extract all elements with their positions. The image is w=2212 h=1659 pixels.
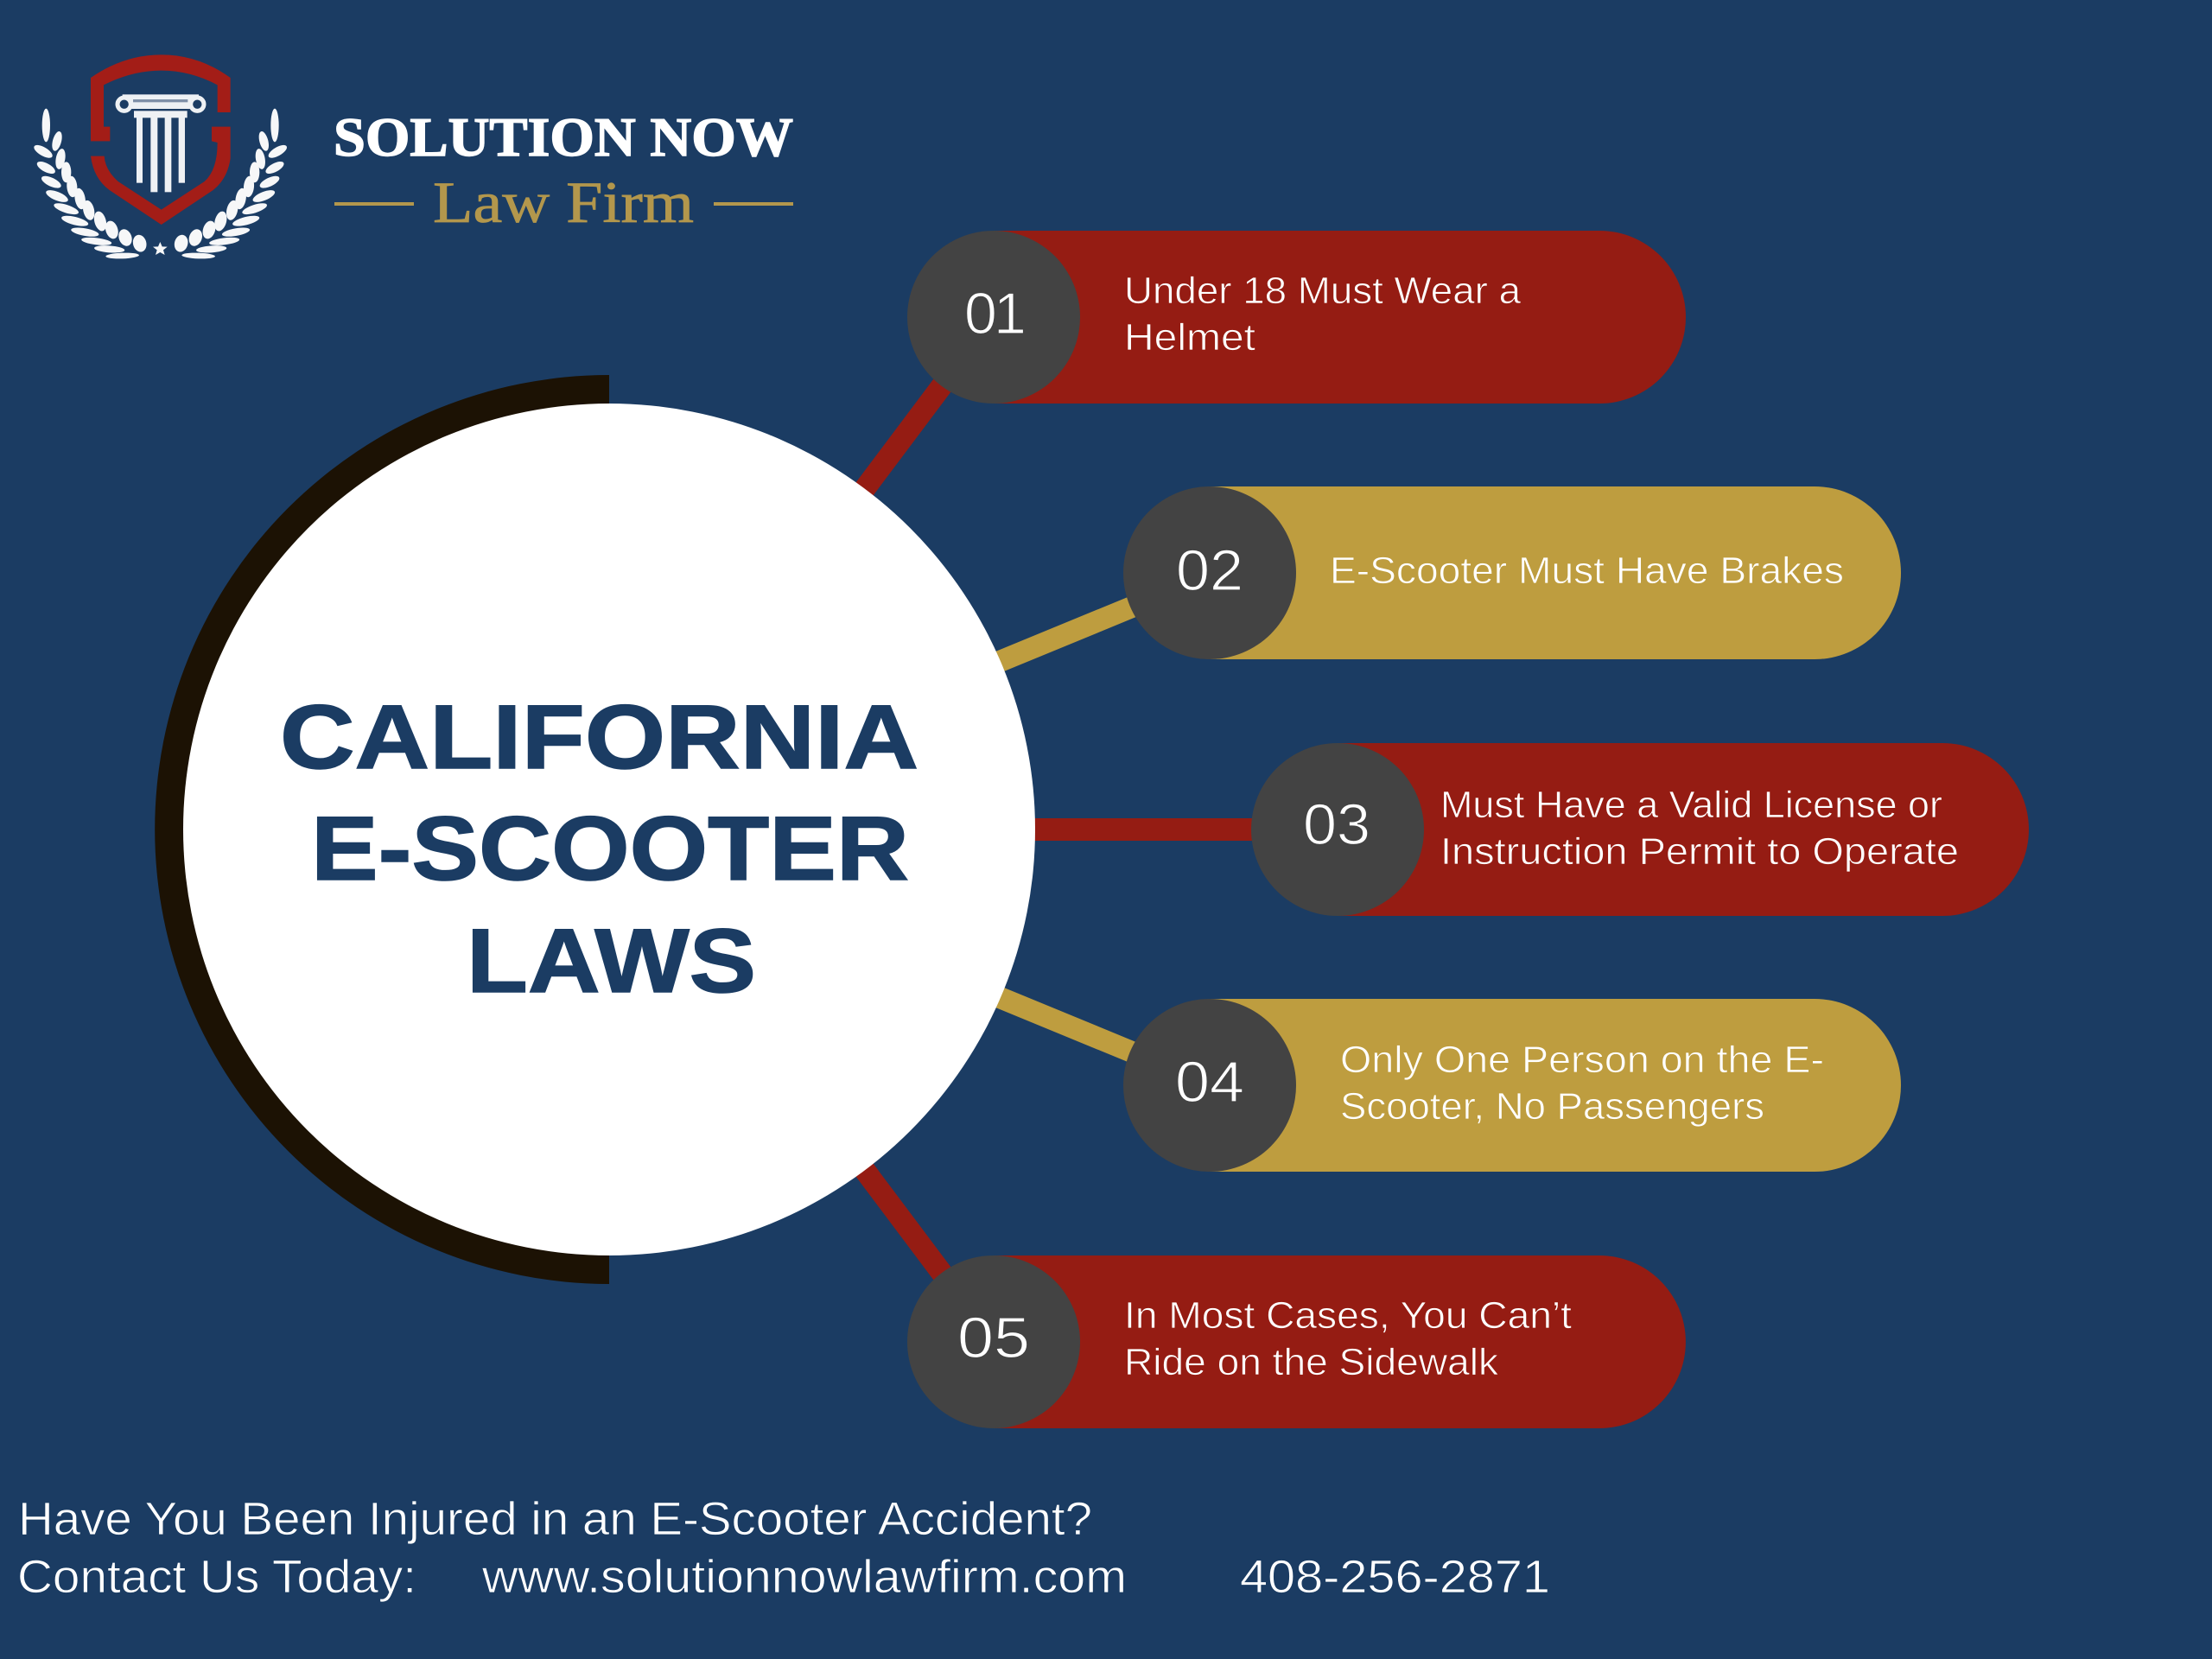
icon: star <box>153 242 168 255</box>
firm name: SOLUTION NOW <box>334 107 793 168</box>
text 05 <box>1124 1294 1572 1383</box>
number badge 01 <box>907 231 1080 404</box>
text 01: Under 18 Must Wear a <box>1124 270 1522 312</box>
title: CALIFORNIA <box>280 687 918 788</box>
dark half ring <box>155 375 609 1284</box>
number 04: 04 <box>1175 1050 1244 1115</box>
firm subtitle: Law Firm <box>433 169 694 235</box>
number 03: 03 <box>1303 792 1370 857</box>
white circle <box>183 404 1035 1255</box>
text 03 <box>1440 784 1959 873</box>
connector 04 <box>950 977 1166 1066</box>
icon: right laurel <box>173 109 289 259</box>
pill 03 <box>1338 743 2029 916</box>
footer question: Have You Been Injured in an E-Scooter Accident? <box>18 1493 1092 1545</box>
phone number: 408-256-2871 <box>1240 1551 1550 1603</box>
number badge 04 <box>1123 999 1296 1172</box>
number 02: 02 <box>1176 538 1243 603</box>
title: E-SCOOTER <box>311 798 909 899</box>
connector 03 <box>950 818 1296 841</box>
item 02 <box>1123 486 1901 659</box>
text 03: Instruction Permit to Operate <box>1440 830 1959 873</box>
connector 05 <box>830 1123 972 1313</box>
title: LAWS <box>467 911 756 1012</box>
pill 01 <box>994 231 1686 404</box>
subtitle rule right <box>714 202 793 206</box>
text 04: Only One Person on the E- <box>1340 1039 1824 1081</box>
text 04: Scooter, No Passengers <box>1340 1085 1764 1128</box>
pill 05 <box>994 1255 1686 1428</box>
item 01 <box>907 231 1686 404</box>
icon: shield, column and laurel <box>32 54 289 259</box>
icon: left laurel <box>32 109 149 259</box>
footer call to action <box>17 1493 1550 1603</box>
item 05 <box>907 1255 1686 1428</box>
text 05: Ride on the Sidewalk <box>1124 1341 1499 1383</box>
text 04 <box>1340 1039 1824 1128</box>
pill 02 <box>1210 486 1901 659</box>
logo: Solution Now Law Firm <box>32 54 793 259</box>
text 01 <box>1124 270 1522 359</box>
contact label: Contact Us Today: <box>17 1551 416 1603</box>
central circle with title <box>155 375 1035 1284</box>
connector 02 <box>950 593 1166 682</box>
number badge 02 <box>1123 486 1296 659</box>
item 03 <box>1251 743 2029 916</box>
icon: white column <box>118 94 204 192</box>
title <box>280 687 918 1012</box>
connector lines <box>830 346 1296 1313</box>
number 01: 01 <box>964 281 1027 346</box>
text 03: Must Have a Valid License or <box>1440 784 1942 826</box>
number 05: 05 <box>957 1306 1030 1370</box>
number badge 03 <box>1251 743 1424 916</box>
text 01: Helmet <box>1124 316 1255 359</box>
item 04 <box>1123 999 1901 1172</box>
pill 04 <box>1210 999 1901 1172</box>
subtitle rule left <box>334 202 414 206</box>
number badge 05 <box>907 1255 1080 1428</box>
icon: red shield <box>91 54 231 225</box>
text 02: E-Scooter Must Have Brakes <box>1330 550 1844 592</box>
connector 01 <box>830 346 972 536</box>
website: www.solutionnowlawfirm.com <box>481 1551 1127 1603</box>
text 05: In Most Cases, You Can’t <box>1124 1294 1572 1337</box>
